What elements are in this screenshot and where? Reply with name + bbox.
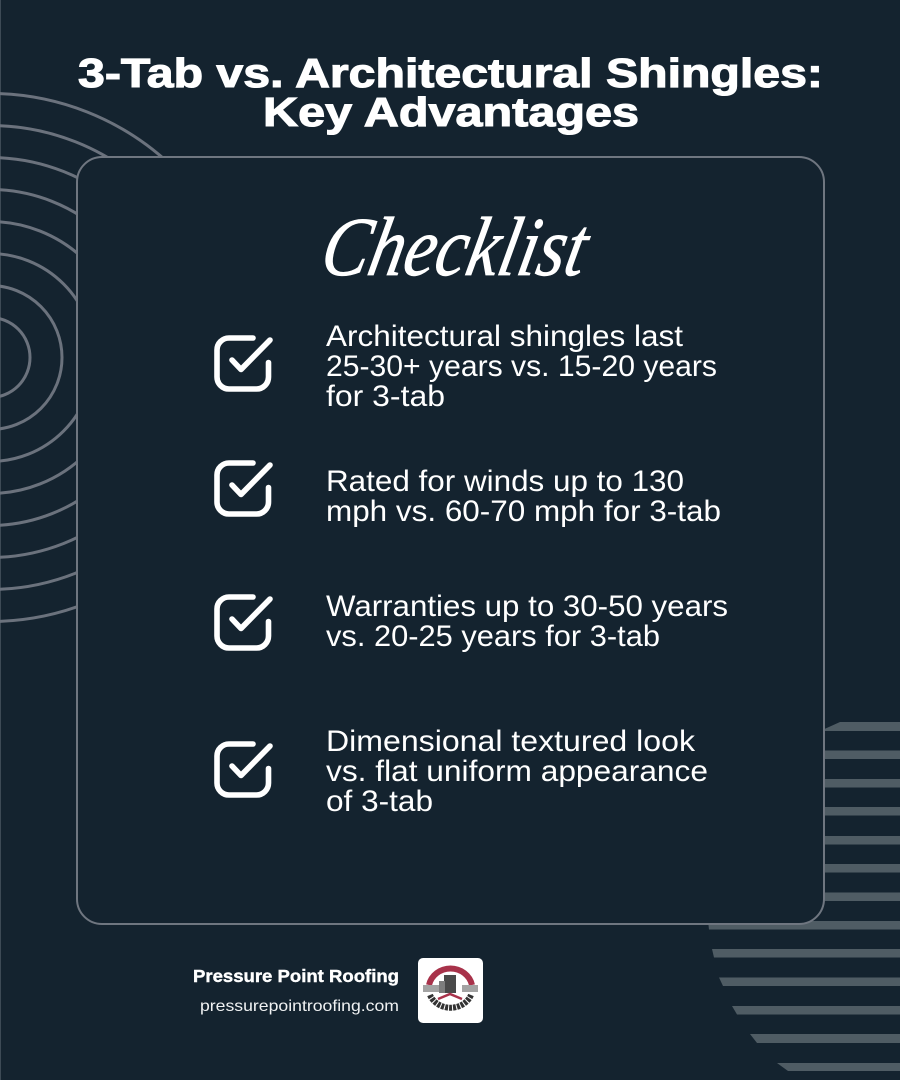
concentric rings decoration [0,94,254,622]
text: item 4 [326,725,708,818]
icon: checkbox 2 [217,463,270,514]
text: item 1: 25-30+ years vs. 15-20 years [326,350,717,383]
icon: checkbox 4 [217,744,270,795]
text: item 3: vs. 20-25 years for 3-tab [326,620,660,653]
footer: company name and website: Pressure Point Roofing [193,966,399,986]
text: item 4: of 3-tab [326,785,433,818]
icon: checkbox 3 [217,597,270,648]
footer: company name and website: pressurepointroofing.com [200,998,399,1015]
text: item 2: Rated for winds up to 130 [326,465,684,498]
checklist item 4 [217,725,708,818]
checklist item 3 [217,590,728,653]
heading: Checklist: Checklist [314,201,599,294]
title: Key Advantages [263,89,639,135]
title [78,50,823,135]
text: item 4: vs. flat uniform appearance [326,755,708,788]
text: item 1 [326,320,717,413]
icon: company logo [418,958,483,1023]
text: item 3: Warranties up to 30-50 years [326,590,728,623]
checklist item 2 [217,463,721,528]
footer: company name and website [193,966,399,1015]
text: item 2: mph vs. 60-70 mph for 3-tab [326,495,721,528]
text: item 3 [326,590,728,653]
text: item 2 [326,465,721,528]
striped decoration [708,722,900,1071]
title: 3-Tab vs. Architectural Shingles: [78,50,823,96]
text: item 1: Architectural shingles last [326,320,683,353]
panel: checklist card [77,157,824,924]
text: item 1: for 3-tab [326,380,445,413]
checklist item 1 [217,320,717,413]
text: item 4: Dimensional textured look [326,725,695,758]
icon: checkbox 1 [217,338,270,389]
